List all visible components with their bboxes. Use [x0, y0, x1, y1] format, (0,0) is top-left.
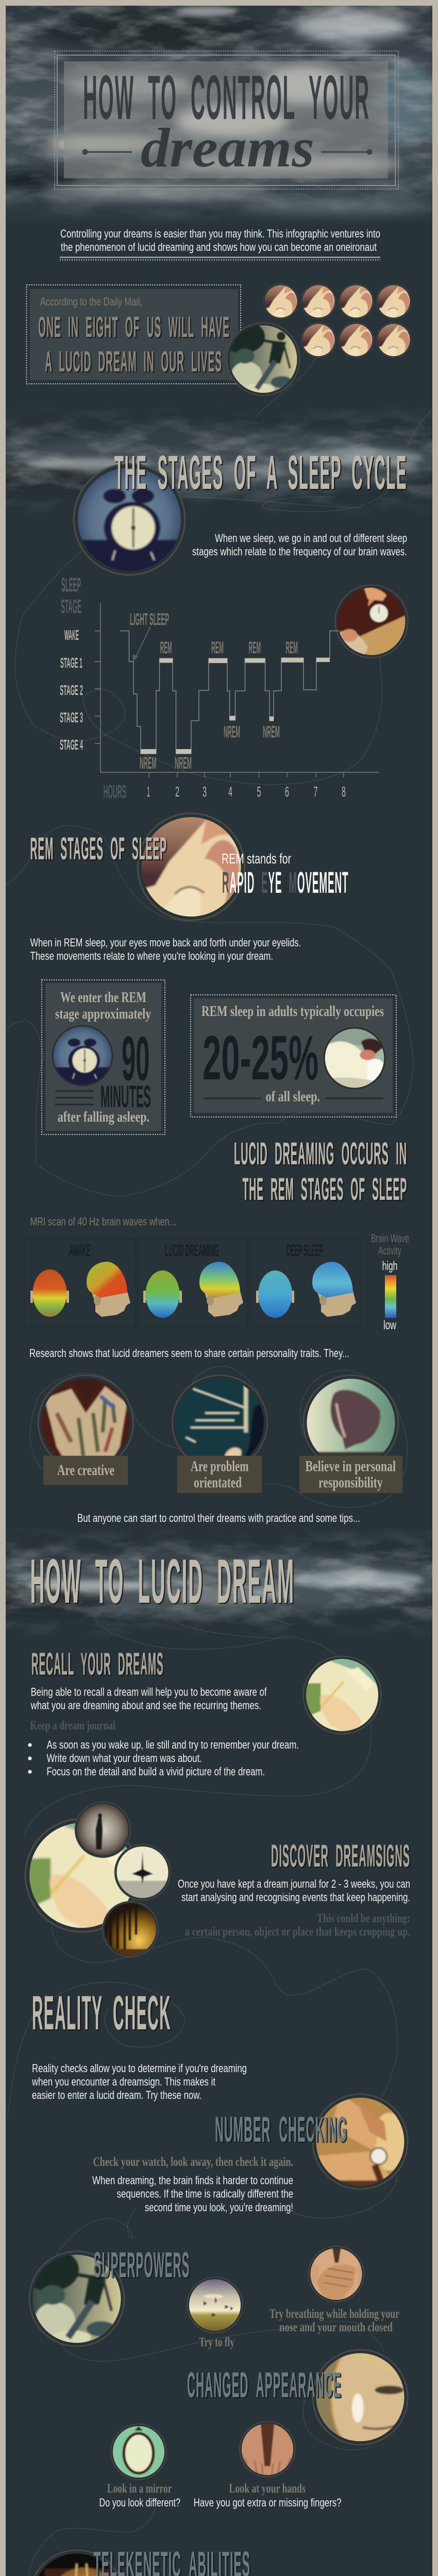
- dotted decorative path: [57, 2177, 397, 2450]
- heads: deep sleep: [256, 1262, 356, 1318]
- text: REM eye movement: [30, 936, 301, 962]
- legend: brain wave activity: low: [383, 1318, 396, 1332]
- text: anyone can start: But anyone can start to control their dreams with practice and some tips...: [77, 1512, 360, 1524]
- hours axis labels: 5: [257, 784, 261, 800]
- intro text: [60, 227, 380, 260]
- title script word: dreams: [141, 117, 314, 179]
- chart: MRI scans: MRI scan of 40 Hz brain waves when...: [30, 1215, 176, 1228]
- section: recall your dreams: what you are dreaming about and see the recurring themes.: [30, 1699, 261, 1712]
- photo: alarm clock: [73, 463, 186, 580]
- section: number checking: Check your watch, look away, then check it again.: [93, 2155, 293, 2169]
- hours axis labels: 6: [285, 784, 289, 800]
- photo: woman in mirror: [312, 2349, 409, 2446]
- panel: trait creative: Are creative: [57, 1462, 114, 1479]
- chart: sleep stage hypnogram: STAGE 1: [60, 655, 82, 671]
- panel: trait problem orientated: [171, 1375, 268, 1493]
- photo: pointing fist: [302, 1375, 399, 1471]
- percent figure: 20-25%: [203, 1023, 318, 1093]
- legend: brain wave activity: Activity: [378, 1244, 401, 1257]
- photo: alarm clock small: [50, 1024, 114, 1090]
- panel: 90 minutes: after falling asleep.: [58, 1109, 149, 1125]
- REM and NREM labels: REM: [160, 638, 172, 657]
- REM and NREM labels: REM: [211, 638, 224, 657]
- section: discover dreamsigns: [178, 1838, 410, 1939]
- photo: painted hands: [37, 1375, 134, 1471]
- section: changed appearance: Do you look different?: [99, 2496, 180, 2509]
- panel: trait personal responsibility: Believe in personal: [305, 1458, 396, 1475]
- chart: sleep stage hypnogram: LIGHT SLEEP: [130, 610, 169, 629]
- title flourishes: [82, 149, 372, 155]
- photo: waking with alarm clock: [334, 584, 409, 658]
- chart: sleep stage hypnogram: [60, 574, 409, 802]
- dotted decorative path: [25, 1606, 372, 1834]
- photo: journal writing: [302, 1655, 382, 1735]
- section: superpowers: [21, 2245, 399, 2349]
- section: telekenetic abilities: [28, 2544, 325, 2576]
- section: recall your dreams: Focus on the detail and build a vivid picture of the dream.: [46, 1765, 265, 1778]
- photo: light bulb: [28, 2549, 125, 2576]
- sky header: [0, 6, 436, 227]
- photo: closed eye: [137, 812, 246, 921]
- panel: 90 minutes: 90: [122, 1024, 149, 1094]
- section: recall your dreams: [28, 1647, 299, 1778]
- text: REM eye movement: When in REM sleep, your eyes move back and forth under your eyelids.: [30, 936, 301, 949]
- panel: 90 minutes: We enter the REM: [60, 989, 146, 1006]
- hours axis labels: 8: [342, 784, 346, 800]
- section: reality check: easier to enter a lucid dream. Try these now.: [32, 2089, 201, 2102]
- legend: brain wave activity: [371, 1232, 409, 1332]
- section: changed appearance: [99, 2349, 409, 2509]
- chart: sleep stage hypnogram: STAGE 4: [60, 737, 83, 753]
- photo: wrist watch: [312, 2093, 409, 2190]
- section: superpowers: SUPERPOWERS: [94, 2245, 190, 2285]
- section: number checking: sequences. If the time is radically different the: [117, 2187, 293, 2200]
- chart: sleep stage hypnogram: WAKE: [64, 627, 79, 643]
- hours axis labels: 7: [313, 784, 317, 800]
- photo: sleeping woman: [322, 1026, 387, 1091]
- REM and NREM labels: NREM: [140, 754, 157, 772]
- hours axis labels: 2: [175, 784, 179, 800]
- lines: [55, 1091, 94, 1105]
- panel: daily mail statistic: [27, 285, 241, 384]
- legend: brain wave activity: high: [382, 1259, 397, 1273]
- text: MINUTES: [100, 1079, 151, 1114]
- photo cluster: dreamsigns: [24, 1801, 171, 1958]
- sky band: how to lucid dream: [0, 1526, 438, 1639]
- callout: light sleep: [130, 610, 169, 662]
- icon: eye photos, one in eight: [221, 283, 411, 396]
- dotted decorative path: [6, 825, 413, 1196]
- dotted decorative path: [8, 1927, 397, 2115]
- hours axis labels: 1: [147, 784, 150, 800]
- section: changed appearance: Have you got extra or missing fingers?: [194, 2496, 341, 2509]
- panel: trait problem orientated: Are problem: [191, 1458, 248, 1475]
- section: recall your dreams: As soon as you wake up, lie still and try to remember your dream.: [46, 1738, 299, 1751]
- dotted decorative path: [28, 2509, 155, 2576]
- hours axis labels: 4: [228, 784, 232, 800]
- chart: MRI scans: AWAKE: [69, 1241, 90, 1260]
- panel: 90 minutes: stage approximately: [55, 1006, 151, 1022]
- REM and NREM labels: NREM: [263, 722, 280, 741]
- REM definition: REM stands for: [222, 851, 291, 867]
- section: superpowers: Try to fly: [199, 2335, 234, 2349]
- section: reality check: [31, 1986, 247, 2102]
- section: reality check: when you encounter a dreamsign. This makes it: [31, 2075, 215, 2088]
- panel: REM stages of sleep: [30, 812, 348, 921]
- legend: brain wave activity: Brain Wave: [371, 1232, 409, 1245]
- REM and NREM labels: [140, 638, 298, 772]
- hours axis labels: 3: [203, 784, 207, 800]
- section: recall your dreams: Being able to recall a dream will help you to become aware of: [31, 1686, 267, 1699]
- sky band: sleep cycle: [6, 410, 432, 509]
- chart: sleep stage hypnogram: REM: [285, 638, 298, 657]
- photo: birds: [187, 2277, 243, 2333]
- REM and NREM labels: NREM: [175, 754, 192, 772]
- panel: trait problem orientated: orientated: [194, 1474, 242, 1491]
- section: number checking: second time you look, you're dreaming!: [145, 2201, 293, 2214]
- panel: trait personal responsibility: [299, 1375, 402, 1493]
- photo: flying man: [21, 2248, 125, 2347]
- photo: ornate mirror: [110, 2424, 167, 2480]
- section: superpowers: nose and your mouth closed: [279, 2320, 393, 2334]
- chart: MRI scans: LUCID DREAMING: [165, 1241, 218, 1260]
- panel: daily mail statistic: According to the Daily Mail,: [40, 295, 142, 308]
- REM definition: [222, 851, 348, 900]
- scan panels: [24, 1239, 360, 1327]
- title panel: [55, 51, 398, 189]
- dotted decorative path: [183, 359, 430, 512]
- section: recall your dreams: Write down what your dream was about.: [46, 1752, 202, 1765]
- dotted decorative path: [15, 552, 382, 785]
- section: changed appearance: Look in a mirror: [107, 2482, 172, 2496]
- panel: 20-25 percent: of all sleep.: [266, 1088, 320, 1105]
- chart: MRI scans: DEEP SLEEP: [287, 1241, 323, 1260]
- section: discover dreamsigns: This could be anything:: [317, 1912, 410, 1925]
- heads: awake: [30, 1262, 130, 1317]
- heads: lucid dreaming: [143, 1262, 243, 1318]
- photo: hands: [239, 2421, 296, 2478]
- dotted decorative path: [30, 1366, 408, 1507]
- text: personality traits intro: Research shows that lucid dreamers seem to share certain personality traits. They...: [29, 1347, 349, 1360]
- photo: chalkboard: [171, 1375, 268, 1471]
- text: REM eye movement: These movements relate to where you're looking in your dream.: [30, 950, 273, 962]
- hours axis labels: HOURS: [104, 781, 126, 802]
- stage bars: [141, 658, 330, 754]
- panel: 20-25 percent: [191, 995, 396, 1117]
- sleep stage line: [120, 631, 340, 754]
- axes: [95, 603, 379, 777]
- heading: lucid dreaming occurs in REM: [234, 1136, 407, 1207]
- section: recall your dreams: Keep a dream journal: [30, 1719, 115, 1733]
- chart: MRI scans: [24, 1215, 409, 1332]
- photo: holding nose: [308, 2246, 365, 2302]
- chart: sleep stage hypnogram: STAGE 2: [60, 682, 83, 698]
- chart: sleep stage hypnogram: SLEEP: [61, 574, 81, 596]
- REM and NREM labels: REM: [248, 638, 261, 657]
- section: reality check: Reality checks allow you to determine if you're dreaming: [32, 2062, 247, 2075]
- hours axis labels: [104, 781, 346, 802]
- section: number checking: When dreaming, the brain finds it harder to continue: [92, 2174, 293, 2187]
- chart: sleep stage hypnogram: STAGE 3: [60, 709, 83, 725]
- panel: 90 minutes: [42, 980, 165, 1134]
- panel: trait creative: [37, 1375, 134, 1485]
- REM and NREM labels: NREM: [224, 722, 240, 741]
- section: changed appearance: Look at your hands: [229, 2482, 306, 2496]
- panel: trait personal responsibility: responsibility: [318, 1474, 383, 1491]
- text: sleep stages intro: [192, 532, 407, 558]
- section: number checking: [92, 2109, 347, 2214]
- chart: sleep stage hypnogram: STAGE: [61, 596, 81, 618]
